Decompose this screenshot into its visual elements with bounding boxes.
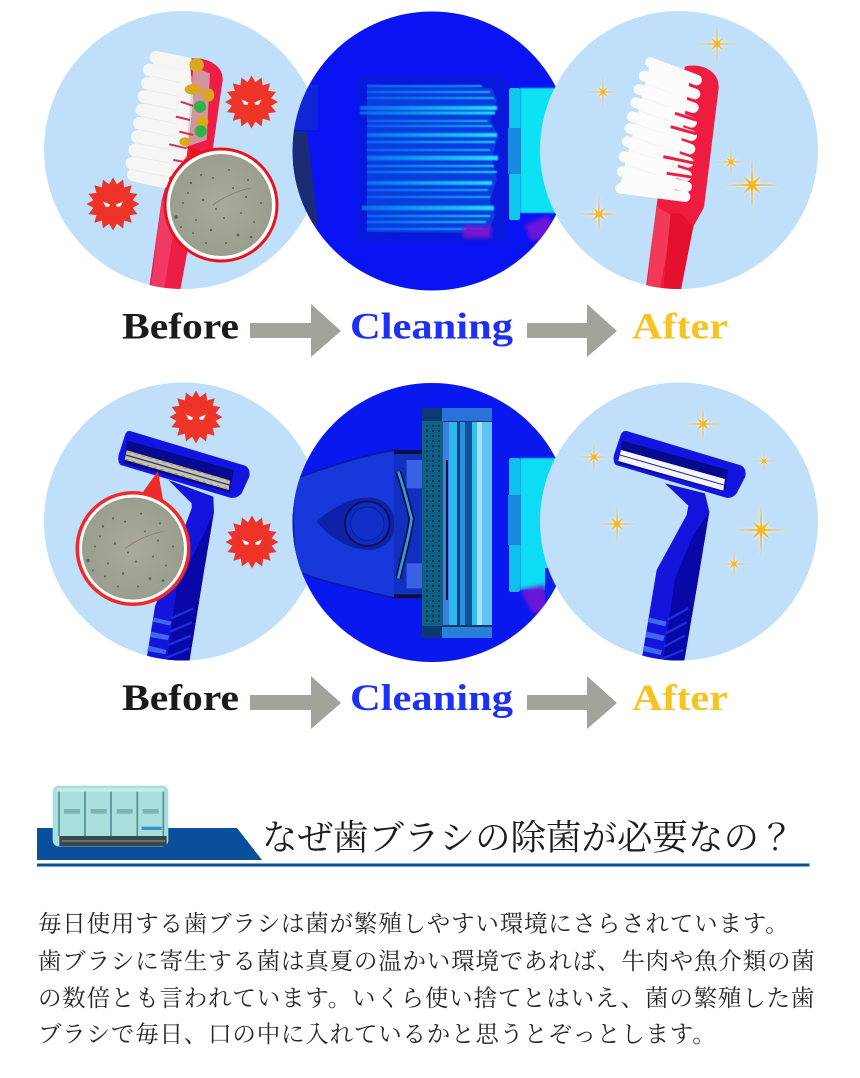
icon: dirty toothbrush [128, 53, 223, 292]
label: Cleaning: Cleaning [350, 306, 514, 348]
callout: magnified bacteria [76, 471, 190, 606]
panel: razor cleaning [292, 383, 572, 662]
body text: ブラシで毎日、口の中に入れているかと思うとぞっとします。 [38, 1021, 717, 1048]
icon: clean toothbrush [618, 58, 719, 292]
label: After: After [632, 678, 728, 719]
arrow: cleaning to after [527, 676, 617, 729]
body text: 歯ブラシに寄生する菌は真夏の温かい環境であれば、牛肉や魚介類の菌 [38, 948, 816, 975]
label: Before: Before [122, 306, 239, 348]
window glow [508, 87, 556, 243]
icon: germ right [226, 516, 278, 568]
label row: toothbrush steps [122, 304, 728, 357]
body text: 毎日使用する歯ブラシは菌が繁殖しやすい環境にさらされています。 [38, 910, 789, 938]
body text [38, 910, 816, 1048]
label: Cleaning: Cleaning [350, 678, 514, 719]
icon: germ top [170, 390, 222, 444]
label row: razor steps [122, 676, 728, 729]
icon: dirty razor [118, 431, 250, 662]
panel: razor after [540, 382, 818, 662]
razor handle closeup [292, 450, 424, 598]
title: なぜ歯ブラシの除菌が必要なの？ [262, 818, 795, 858]
icon: sparkles [577, 403, 790, 580]
panel: toothbrush before [44, 11, 322, 292]
icon: clean razor [614, 431, 746, 662]
icon: sparkles [577, 23, 781, 236]
heading rule [37, 864, 810, 866]
icon: germ upper [225, 76, 278, 128]
arrow: before to cleaning [250, 304, 341, 357]
label: After: After [632, 306, 728, 348]
callout: magnified bacteria [164, 146, 278, 262]
razor cartridge closeup [422, 408, 492, 638]
body text: の数倍とも言われています。いくら使い捨てとはいえ、菌の繁殖した歯 [38, 985, 815, 1012]
icon: germ lower [86, 178, 140, 230]
bristles under light [360, 84, 498, 238]
icon: sterilizer product [53, 786, 168, 846]
panel: toothbrush cleaning [292, 12, 572, 290]
arrow: before to cleaning [250, 676, 341, 729]
label: Before: Before [122, 678, 239, 719]
heading banner [37, 828, 262, 860]
section heading [37, 786, 810, 866]
panel: toothbrush after [540, 11, 818, 292]
arrow: cleaning to after [527, 304, 617, 357]
window glow [508, 457, 556, 616]
panel: razor before [44, 382, 322, 662]
